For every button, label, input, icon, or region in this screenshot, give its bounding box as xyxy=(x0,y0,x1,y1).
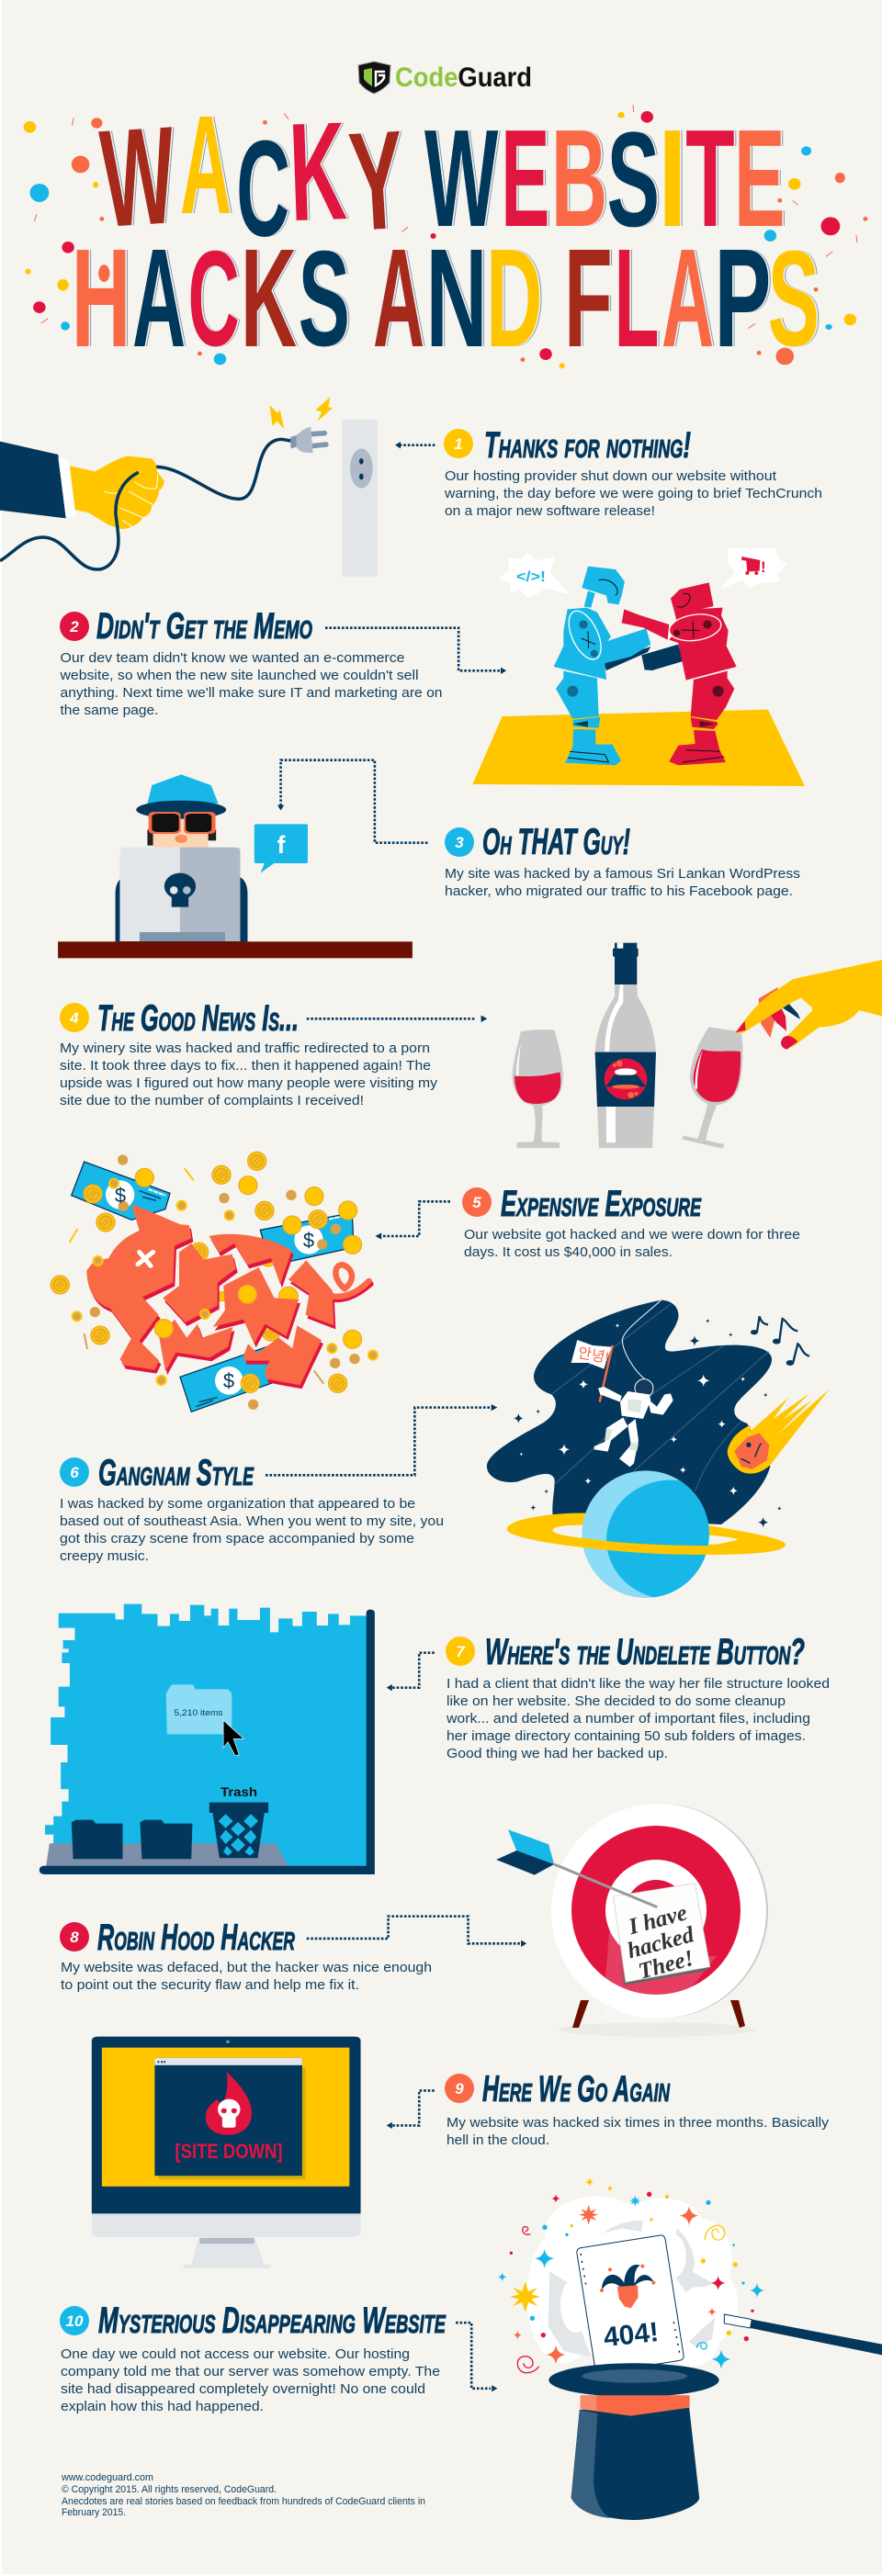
illustration: crumbling desktop with folder and trash: Trash xyxy=(220,1784,257,1799)
section 5: Expensive Exposure: 5 xyxy=(472,1194,481,1211)
arrow 7 xyxy=(387,1653,435,1691)
section 7: Where's the Undelete Button: Good thing we had her backed up. xyxy=(447,1746,668,1761)
section 8: Robin Hood Hacker: My website was defaced, but the hacker was nice enough xyxy=(61,1960,432,1975)
title: Wacky Website Hacks and Flaps: C xyxy=(187,223,240,376)
section 6: Gangnam Style: 6 xyxy=(70,1464,79,1481)
illustration: astronaut in space with planet and meteor xyxy=(487,1300,830,1600)
section 7: Where's the Undelete Button: I had a client that didn't like the way her file structure looked xyxy=(447,1676,830,1692)
section 9: Here We Go Again: 9 xyxy=(455,2080,464,2098)
arrow 4 xyxy=(307,1016,487,1022)
illustration: wine bottle, glasses and hand xyxy=(513,943,882,1149)
section 9: Here We Go Again xyxy=(445,2069,830,2148)
illustration: monitor with site down: [SITE DOWN] xyxy=(175,2140,283,2163)
section 4: The Good News Is: site due to the number of complaints I received! xyxy=(60,1093,364,1108)
illustration: target with arrow and note: hacked xyxy=(625,1922,697,1963)
title: Wacky Website Hacks and Flaps: E xyxy=(734,101,786,255)
section 7: Where's the Undelete Button: like on her website. She decided to do some cleanup xyxy=(447,1693,786,1709)
illustration: monitor with site down xyxy=(92,2037,361,2268)
title: Wacky Website Hacks and Flaps xyxy=(72,85,820,377)
section 8: Robin Hood Hacker: Robin Hood Hacker xyxy=(97,1918,295,1958)
title: Wacky Website Hacks and Flaps: A xyxy=(662,219,714,377)
footer: Anecdotes are real stories based on feedback from hundreds of CodeGuard clients in xyxy=(62,2496,425,2507)
section 2: Didn't Get the Memo: Didn't Get the Memo xyxy=(96,606,312,647)
illustration: smashed piggy bank with coins xyxy=(51,1152,378,1412)
logo: CodeGuard: CodeGuard xyxy=(395,62,532,93)
section 10: Mysterious Disappearing Website: Mysterious Disappearing Website xyxy=(98,2300,447,2341)
title: Wacky Website Hacks and Flaps: A xyxy=(373,219,424,377)
illustration: smashed piggy bank with coins: $ xyxy=(223,1369,234,1392)
title: Wacky Website Hacks and Flaps: I xyxy=(658,102,687,256)
section 4: The Good News Is: My winery site was hacked and traffic redirected to a porn xyxy=(60,1041,430,1056)
title: Wacky Website Hacks and Flaps: W xyxy=(424,100,499,255)
section 6: Gangnam Style: got this crazy scene from space accompanied by some xyxy=(60,1531,414,1547)
illustration: target with arrow and note: I have xyxy=(625,1900,690,1940)
illustration: smashed piggy bank with coins: $ xyxy=(303,1229,314,1252)
arrow 9 xyxy=(387,2090,435,2129)
section 6: Gangnam Style: creepy music. xyxy=(60,1548,149,1564)
title: Wacky Website Hacks and Flaps: K xyxy=(287,94,349,252)
section 7: Where's the Undelete Button: work... and deleted a number of important files, including xyxy=(446,1711,810,1727)
illustration: hacker at laptop: f xyxy=(277,831,287,859)
section 2: Didn't Get the Memo: Our dev team didn't know we wanted an e-commerce xyxy=(61,650,404,666)
title: Wacky Website Hacks and Flaps: B xyxy=(551,100,607,255)
section 6: Gangnam Style: I was hacked by some organization that appeared to be xyxy=(60,1496,415,1512)
section 4: The Good News Is: site. It took three days to fix... then it happened again! The xyxy=(60,1058,431,1074)
section 2: Didn't Get the Memo: anything. Next time we'll make sure IT and marketing are on xyxy=(61,685,443,701)
section 8: Robin Hood Hacker: 8 xyxy=(70,1929,79,1946)
footer: © Copyright 2015. All rights reserved, CodeGuard. xyxy=(62,2484,277,2495)
illustration: magic hat, card and wand: 404! xyxy=(602,2317,661,2353)
arrow 8 xyxy=(307,1917,526,1947)
section 6: Gangnam Style xyxy=(60,1453,444,1564)
title: Wacky Website Hacks and Flaps: K xyxy=(241,220,297,377)
title: Wacky Website Hacks and Flaps: S xyxy=(606,104,660,255)
section 1: Thanks for nothing xyxy=(444,425,822,519)
section 5: Expensive Exposure xyxy=(462,1184,800,1260)
section 7: Where's the Undelete Button xyxy=(446,1632,830,1761)
section 9: Here We Go Again: hell in the cloud. xyxy=(447,2132,549,2148)
title: Wacky Website Hacks and Flaps: P xyxy=(715,219,771,377)
confetti xyxy=(24,105,867,368)
illustration: magic hat, card and wand xyxy=(498,2177,882,2520)
section 2: Didn't Get the Memo: website, so when the new site launched we couldn't sell xyxy=(59,668,418,683)
illustration: fighting robots xyxy=(472,548,805,786)
arrow 1 xyxy=(395,442,435,448)
section 10: Mysterious Disappearing Website: company told me that our server was somehow empty. The xyxy=(61,2364,440,2379)
arrow 3 xyxy=(277,760,427,843)
arrow 10 xyxy=(456,2323,497,2391)
title: Wacky Website Hacks and Flaps: Y xyxy=(345,102,409,261)
title: Wacky Website Hacks and Flaps: C xyxy=(235,112,291,265)
section 10: Mysterious Disappearing Website: site had disappeared completely overnight! No one could xyxy=(61,2381,425,2397)
section 1: Thanks for nothing: Thanks for nothing! xyxy=(484,425,691,466)
illustration: crumbling desktop with folder and trash xyxy=(40,1604,375,1874)
section 3: Oh THAT Guy xyxy=(445,822,800,899)
section 2: Didn't Get the Memo xyxy=(59,606,442,718)
footer: February 2015. xyxy=(62,2507,126,2518)
title: Wacky Website Hacks and Flaps: W xyxy=(96,96,180,256)
illustration: target with arrow and note: Thee! xyxy=(636,1946,696,1985)
illustration: hand unplugging cord from outlet xyxy=(0,397,378,577)
footer xyxy=(61,2472,425,2518)
title: Wacky Website Hacks and Flaps: E xyxy=(501,101,550,255)
title: Wacky Website Hacks and Flaps: S xyxy=(299,222,350,375)
illustration: crumbling desktop with folder and trash: 5,210 items xyxy=(175,1708,223,1717)
section 4: The Good News Is: 4 xyxy=(69,1009,79,1027)
illustration: fighting robots: ! xyxy=(761,558,766,576)
section 2: Didn't Get the Memo: the same page. xyxy=(61,703,158,718)
section 2: Didn't Get the Memo: 2 xyxy=(69,618,79,636)
section 3: Oh THAT Guy: 3 xyxy=(455,834,464,851)
section 6: Gangnam Style: based out of southeast Asia. When you went to my site, you xyxy=(60,1513,444,1529)
section 8: Robin Hood Hacker: to point out the security flaw and help me fix it. xyxy=(61,1977,359,1993)
section 1: Thanks for nothing: warning, the day before we were going to brief TechCrunch xyxy=(444,486,822,501)
illustration: fighting robots: </>! xyxy=(516,569,546,585)
title: Wacky Website Hacks and Flaps: F xyxy=(564,220,613,377)
section 5: Expensive Exposure: Our website got hacked and we were down for three xyxy=(464,1227,800,1243)
illustration: smashed piggy bank with coins: $ xyxy=(115,1184,126,1207)
title: Wacky Website Hacks and Flaps: H xyxy=(72,219,130,377)
illustration: astronaut in space with planet and meteor: 안녕! xyxy=(577,1344,610,1367)
footer: www.codeguard.com xyxy=(61,2472,153,2483)
title: Wacky Website Hacks and Flaps: A xyxy=(132,219,186,377)
section 4: The Good News Is: upside was I figured out how many people were visiting my xyxy=(60,1075,438,1091)
title: Wacky Website Hacks and Flaps: L xyxy=(614,219,660,377)
section 10: Mysterious Disappearing Website: explain how this had happened. xyxy=(61,2399,264,2414)
section 10: Mysterious Disappearing Website xyxy=(60,2300,447,2414)
section 5: Expensive Exposure: days. It cost us $40,000 in sales. xyxy=(464,1244,673,1260)
section 1: Thanks for nothing: 1 xyxy=(454,435,463,453)
section 4: The Good News Is xyxy=(60,998,438,1108)
section 10: Mysterious Disappearing Website: 10 xyxy=(66,2312,84,2330)
title: Wacky Website Hacks and Flaps: T xyxy=(685,101,735,256)
section 10: Mysterious Disappearing Website: One day we could not access our website. Our hosting xyxy=(61,2346,410,2362)
arrow 6 xyxy=(266,1404,497,1475)
illustration: target with arrow and note xyxy=(496,1804,768,2037)
section 3: Oh THAT Guy: Oh THAT Guy! xyxy=(482,822,630,862)
arrow 5 xyxy=(375,1201,450,1240)
title: Wacky Website Hacks and Flaps: A xyxy=(180,85,232,243)
section 1: Thanks for nothing: Our hosting provider shut down our website without xyxy=(445,468,777,484)
section 4: The Good News Is: The Good News Is... xyxy=(97,998,299,1039)
section 3: Oh THAT Guy: hacker, who migrated our traffic to his Facebook page. xyxy=(445,883,793,899)
illustration: hacker at laptop xyxy=(58,774,413,958)
title: Wacky Website Hacks and Flaps: D xyxy=(486,220,543,377)
section 5: Expensive Exposure: Expensive Exposure xyxy=(501,1184,702,1224)
section 7: Where's the Undelete Button: 7 xyxy=(456,1643,466,1660)
section 3: Oh THAT Guy: My site was hacked by a famous Sri Lankan WordPress xyxy=(445,866,800,882)
title: Wacky Website Hacks and Flaps: N xyxy=(426,219,488,377)
section 7: Where's the Undelete Button: her image directory containing 50 sub folders of images. xyxy=(447,1728,806,1744)
title: Wacky Website Hacks and Flaps: S xyxy=(768,222,820,375)
section 9: Here We Go Again: My website was hacked six times in three months. Basically xyxy=(447,2115,830,2131)
section 1: Thanks for nothing: on a major new software release! xyxy=(445,503,655,519)
section 9: Here We Go Again: Here We Go Again xyxy=(482,2069,670,2109)
arrow 2 xyxy=(325,628,506,674)
section 8: Robin Hood Hacker xyxy=(60,1918,432,1993)
section 6: Gangnam Style: Gangnam Style xyxy=(98,1453,254,1493)
